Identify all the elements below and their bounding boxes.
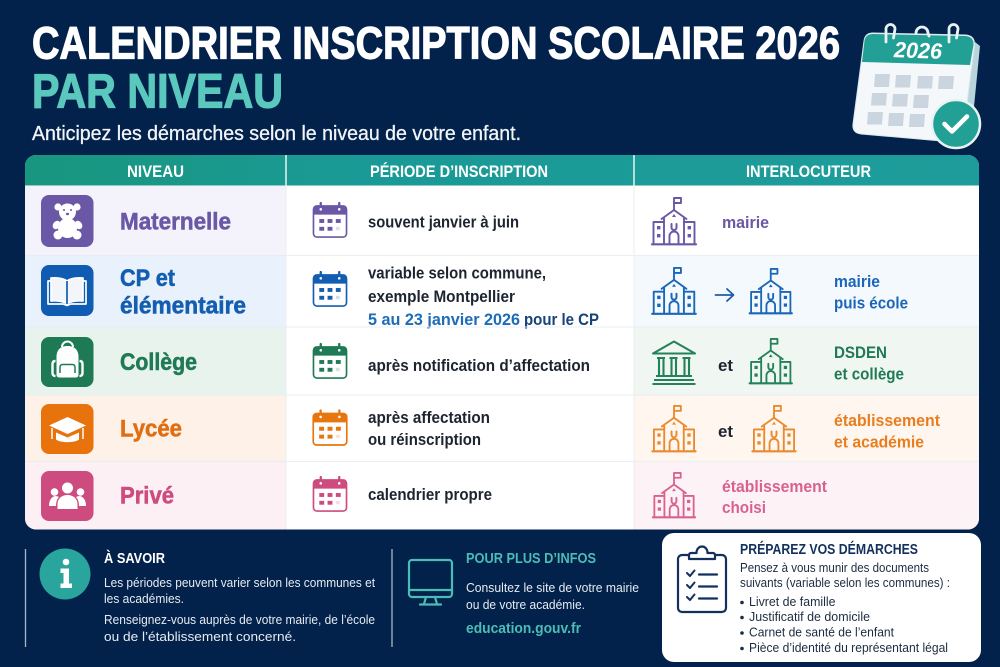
subtitle: Anticipez les démarches selon le niveau de votre enfant. xyxy=(32,123,521,145)
period: 5 au 23 janvier 2026 xyxy=(368,310,520,329)
icon: school xyxy=(652,198,696,244)
icon: calendar xyxy=(313,477,347,511)
heading: PRÉPAREZ VOS DÉMARCHES xyxy=(740,541,918,558)
contact: DSDEN xyxy=(834,343,887,362)
icon: clipboard checklist xyxy=(678,546,726,612)
intro text: suivants (variable selon les communes) : xyxy=(740,576,950,590)
contact: et académie xyxy=(834,432,924,452)
icons: school and school xyxy=(652,406,796,451)
period: exemple Montpellier xyxy=(368,287,515,306)
contact xyxy=(835,275,908,312)
level name: Maternelle xyxy=(120,208,231,236)
panel: table xyxy=(25,155,979,530)
row: Collège xyxy=(25,327,979,395)
row: Privé xyxy=(25,462,979,530)
contact: établissement xyxy=(722,477,827,496)
body text: Consultez le site de votre mairie xyxy=(466,581,639,595)
icons: institution and school: et xyxy=(718,356,733,375)
icon: calendar xyxy=(313,203,347,237)
table header: NIVEAU xyxy=(127,163,184,181)
period: variable selon commune, xyxy=(368,264,546,282)
icon: calendar 2026 with check mark xyxy=(853,24,980,148)
icons: school to school xyxy=(652,268,792,314)
contact: choisi xyxy=(722,498,766,517)
level name: élémentaire xyxy=(120,292,246,320)
icons: school and school: et xyxy=(718,422,733,441)
row: Maternelle xyxy=(25,186,769,255)
document list xyxy=(740,595,948,655)
link: education.gouv.fr xyxy=(466,621,581,637)
heading: POUR PLUS D’INFOS xyxy=(466,551,596,567)
icon: graduation cap xyxy=(41,404,94,454)
icon: backpack xyxy=(41,337,94,387)
intro text: Pensez à vous munir des documents xyxy=(740,561,929,575)
period xyxy=(368,264,599,329)
contact: mairie xyxy=(834,272,880,291)
contact xyxy=(722,480,827,513)
heading: À SAVOIR xyxy=(104,550,165,567)
title: PAR NIVEAU xyxy=(32,64,283,118)
level name: Collège xyxy=(120,349,197,376)
icon: calendar xyxy=(313,344,347,378)
body text: ou de l’établissement concerné. xyxy=(104,630,296,644)
period xyxy=(368,408,490,449)
icon: school xyxy=(653,473,695,517)
icon: monitor xyxy=(409,560,452,604)
body text: ou de votre académie. xyxy=(466,598,585,612)
panel: préparez vos démarches xyxy=(662,533,981,662)
document list: Carnet de santé de l’enfant xyxy=(749,626,895,640)
document list: Pièce d’identité du représentant légal xyxy=(749,641,948,655)
period: après notification d’affectation xyxy=(368,356,590,375)
icon: calendar xyxy=(313,272,347,306)
icon: open book xyxy=(41,265,94,316)
contact: puis école xyxy=(834,294,908,312)
body text xyxy=(104,576,375,644)
level name xyxy=(120,269,246,314)
title xyxy=(32,18,840,118)
icon: calendar xyxy=(313,410,347,445)
body text xyxy=(466,581,639,612)
icons: institution and school xyxy=(652,339,792,384)
period: après affectation xyxy=(368,408,490,427)
level name: Lycée xyxy=(120,416,182,442)
period: ou réinscription xyxy=(368,430,481,449)
panel: pour plus d'infos xyxy=(409,551,639,637)
document list: Livret de famille xyxy=(749,595,836,609)
document list: Justificatif de domicile xyxy=(749,610,870,624)
row: Lycée xyxy=(25,395,979,462)
table header: PÉRIODE D’INSCRIPTION xyxy=(370,162,548,181)
contact: établissement xyxy=(834,411,940,430)
contact: mairie xyxy=(722,213,769,232)
level name: CP et xyxy=(120,265,175,292)
icon: calendar 2026 with check mark: 2026 xyxy=(893,37,943,64)
contact xyxy=(834,414,940,448)
panel: à savoir xyxy=(26,548,392,647)
body text: Renseignez-vous auprès de votre mairie, de l’école xyxy=(104,613,375,627)
table header: INTERLOCUTEUR xyxy=(746,163,871,181)
icon: info xyxy=(40,548,90,600)
body text: Les périodes peuvent varier selon les communes et xyxy=(104,576,375,590)
intro text xyxy=(740,561,950,590)
contact xyxy=(834,346,904,383)
row: CP et élémentaire xyxy=(25,255,979,329)
level name: Privé xyxy=(120,482,174,510)
period: pour le CP xyxy=(524,310,599,329)
contact: et collège xyxy=(834,364,904,384)
icon: teddy bear xyxy=(41,195,94,247)
table header xyxy=(25,155,979,186)
body text: les académies. xyxy=(104,592,184,606)
title: CALENDRIER INSCRIPTION SCOLAIRE 2026 xyxy=(32,18,840,68)
period: souvent janvier à juin xyxy=(368,212,519,232)
period: calendrier propre xyxy=(368,485,492,504)
icon: group of people xyxy=(41,471,94,521)
